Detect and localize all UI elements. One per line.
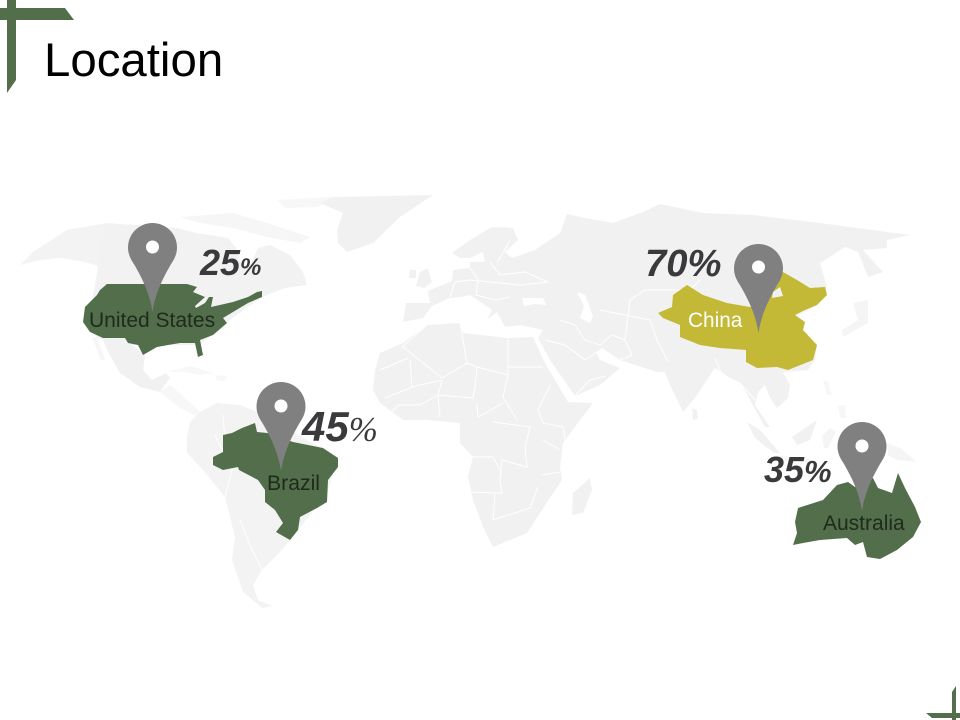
- value: 45%: 45%: [301, 403, 378, 450]
- label: China: China: [688, 309, 743, 332]
- notch: Mongolia gap: [772, 287, 783, 298]
- title: Location: [44, 34, 223, 87]
- corner accent: bottom right: [926, 686, 960, 720]
- country shape: Brazil: [213, 423, 338, 540]
- pin: Australia: [838, 422, 886, 511]
- corner accent: top left: [0, 0, 74, 93]
- pin: Brazil: [256, 382, 306, 471]
- location: United States: [83, 223, 262, 357]
- location: Brazil: [213, 382, 378, 540]
- world map background: [20, 195, 917, 608]
- pin: United States: [128, 223, 177, 312]
- pin: China: [734, 244, 783, 333]
- country shape: Australia: [793, 473, 921, 559]
- inland seas: [522, 292, 593, 323]
- label: Australia: Australia: [823, 512, 905, 535]
- label: Brazil: Brazil: [267, 472, 320, 495]
- location: China: [645, 242, 827, 370]
- country shape: China: [658, 272, 827, 370]
- location: Australia: [764, 422, 921, 559]
- map borders and inland water: [215, 240, 755, 570]
- value: 25%: 25%: [199, 242, 261, 283]
- value: 35%: 35%: [764, 449, 832, 490]
- country shape: United States: [83, 284, 262, 357]
- value: 70%: 70%: [645, 242, 721, 285]
- label: United States: United States: [89, 309, 215, 332]
